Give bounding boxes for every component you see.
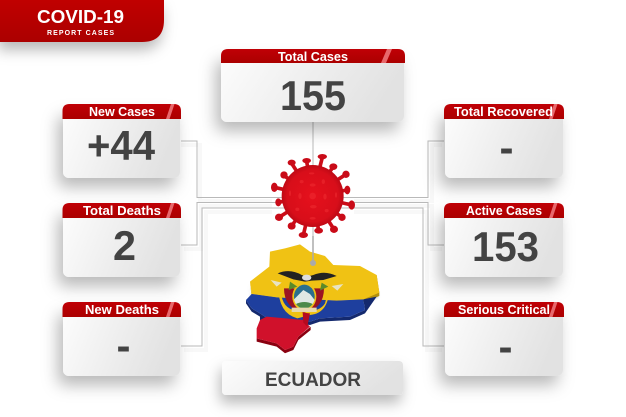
coat of arms [271,271,343,327]
value: - [500,124,514,171]
virus icon [271,154,355,238]
value: 2 [113,222,136,269]
label: Serious Critical [458,303,550,317]
value: - [116,322,130,369]
red band [257,317,310,350]
map extrusion: yellow edge [250,275,379,304]
label: Active Cases [466,204,542,218]
panel: total cases [221,49,405,122]
panel: active cases [444,203,564,277]
value: 155 [280,72,346,119]
panel: serious critical [444,302,564,376]
map of Ecuador with flag [246,244,379,353]
value: - [498,323,512,370]
label: New Cases [89,105,155,119]
panel: total deaths [62,203,181,277]
banner title: COVID-19 [37,6,124,27]
map extrusion: red edge [257,327,311,353]
value: 153 [472,223,539,270]
value: +44 [87,122,156,169]
connector lines [181,122,444,350]
blue band [246,294,365,322]
condor [278,271,337,282]
label: Total Deaths [83,204,161,218]
panel: total recovered [444,104,564,178]
label: New Deaths [85,303,159,317]
label: Total Cases [278,50,348,64]
panel: new cases [62,104,181,178]
yellow band [250,244,379,301]
map extrusion: blue edge [246,297,377,327]
banner subtitle: REPORT CASES [47,30,114,37]
banner [292,308,317,312]
panel: new deaths [62,302,181,376]
header banner [0,0,164,42]
country name: ECUADOR [265,369,361,391]
label: Total Recovered [454,105,553,119]
shield [292,283,316,311]
map connector [310,236,316,266]
country label [222,361,403,395]
